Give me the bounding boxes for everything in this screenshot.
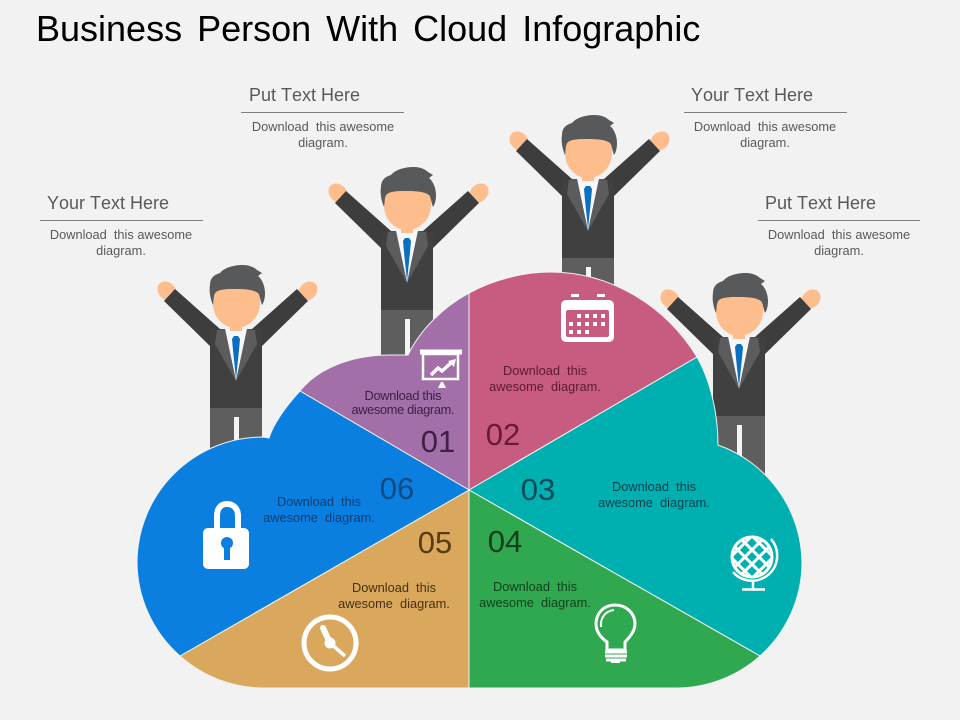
text: description: Download this awesome <box>694 119 836 134</box>
heading: your text here: Your Text Here <box>47 193 169 213</box>
label block: top left-centre <box>241 85 404 150</box>
segment 01 text <box>352 388 455 459</box>
icon: clock <box>304 617 356 669</box>
description 02: Download this <box>503 363 587 378</box>
number 05: 05 <box>418 525 452 560</box>
text: description: diagram. <box>814 243 864 258</box>
text: description: Download this awesome <box>252 119 394 134</box>
heading: put text here: Put Text Here <box>765 193 876 213</box>
number 02: 02 <box>486 417 520 452</box>
segment 06 text <box>263 471 414 525</box>
icon: globe <box>730 536 778 591</box>
cloud segmented chart <box>137 272 802 688</box>
description 06: Download this <box>277 494 361 509</box>
title: Business Person With Cloud Infographic <box>36 8 700 49</box>
label block: top right-centre <box>684 85 847 150</box>
business person 4 <box>657 273 824 496</box>
segment 03 teal <box>469 357 802 656</box>
label block: far right <box>758 193 920 258</box>
label block: far left <box>40 193 203 258</box>
segment 04 green <box>469 490 760 688</box>
heading: your text here: Your Text Here <box>691 85 813 105</box>
text: description: Download this awesome <box>50 227 192 242</box>
description 06: awesome diagram. <box>263 510 375 525</box>
icon: light bulb <box>596 605 635 663</box>
number 01: 01 <box>421 424 455 459</box>
description 05: Download this <box>352 580 436 595</box>
heading: put text here: Put Text Here <box>249 85 360 105</box>
segment 05 text <box>338 525 452 611</box>
segment 04 text <box>479 524 591 610</box>
description 01: awesome diagram. <box>352 402 454 417</box>
segment 03 text <box>521 472 710 510</box>
segment 02 text <box>486 363 601 452</box>
number 04: 04 <box>488 524 522 559</box>
text: description: diagram. <box>96 243 146 258</box>
number 03: 03 <box>521 472 555 507</box>
text: description: diagram. <box>298 135 348 150</box>
segment 06 blue <box>137 391 469 656</box>
segment 02 pink <box>469 272 697 490</box>
number 06: 06 <box>380 471 414 506</box>
description 05: awesome diagram. <box>338 596 450 611</box>
segment 01 purple <box>300 293 469 490</box>
business person 2 <box>325 167 492 390</box>
description 01: Download this <box>364 388 442 403</box>
description 04: Download this <box>493 579 577 594</box>
text: description: diagram. <box>740 135 790 150</box>
segment 05 tan <box>180 490 469 688</box>
business person 3 <box>506 115 673 338</box>
description 03: awesome diagram. <box>598 495 710 510</box>
business person 1 <box>154 265 321 488</box>
icon: calendar <box>561 294 614 342</box>
description 04: awesome diagram. <box>479 595 591 610</box>
description 03: Download this <box>612 479 696 494</box>
icon: presentation board <box>420 352 462 388</box>
text: description: Download this awesome <box>768 227 910 242</box>
description 02: awesome diagram. <box>489 379 601 394</box>
icon: padlock <box>203 504 249 569</box>
